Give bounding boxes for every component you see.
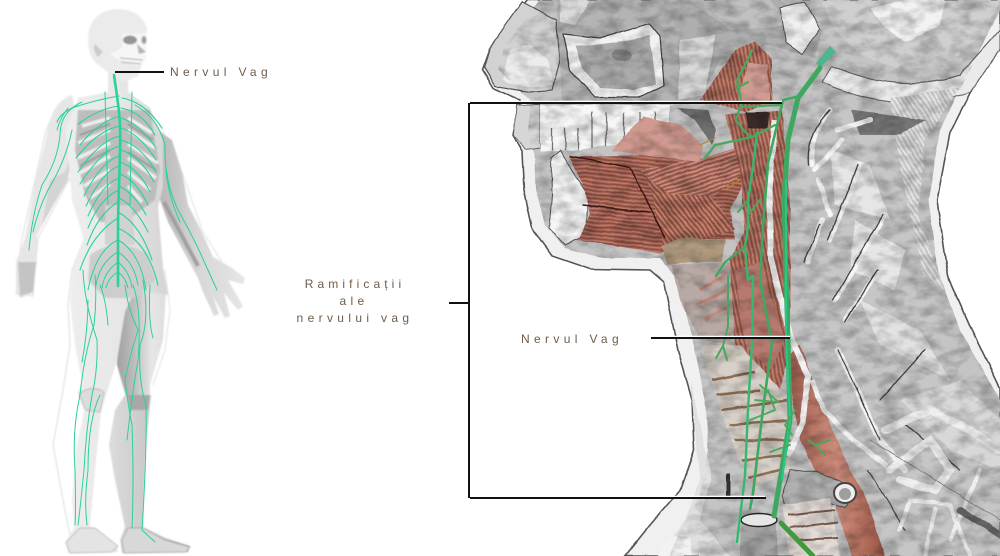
near leg nerves xyxy=(74,270,108,525)
pelvis branches xyxy=(88,92,146,290)
brain and cerebellum xyxy=(820,0,1000,70)
third trunk xyxy=(737,133,757,542)
vessel ring xyxy=(834,483,856,503)
rib cage xyxy=(75,110,160,222)
upper branches xyxy=(705,50,780,158)
second trunk xyxy=(750,96,800,509)
torso and near leg xyxy=(65,70,168,553)
upper pharynx muscles xyxy=(700,42,772,112)
mastoid bone xyxy=(780,2,820,54)
far leg nerves xyxy=(125,280,155,542)
left arm and hand xyxy=(16,95,80,298)
heading label: Nervul Vag left: Nervul Vag xyxy=(170,65,272,79)
central muscle column xyxy=(722,110,790,390)
panel: neck and head anatomy illustration xyxy=(470,0,1000,556)
upper skull shading xyxy=(556,0,688,102)
pelvis xyxy=(88,245,155,298)
lower trachea rings xyxy=(782,498,840,556)
rib branches xyxy=(57,96,120,270)
sinus cavity xyxy=(563,24,664,97)
right arm nerves xyxy=(135,105,217,290)
texture overlay xyxy=(470,0,1000,556)
label: Nervul Vag right with leader line: Nervul Vag xyxy=(521,332,623,346)
skull head xyxy=(88,9,147,82)
green nerves xyxy=(29,75,217,542)
right arm and hand xyxy=(150,125,245,318)
body silhouette xyxy=(16,9,245,553)
white internal jugular vein xyxy=(769,120,808,456)
larynx grey xyxy=(672,262,735,345)
floor of mouth and tongue muscles xyxy=(570,117,750,253)
organic anatomy base layer xyxy=(470,0,1000,556)
far leg xyxy=(117,285,166,400)
hyoid fragment xyxy=(662,238,725,265)
feet xyxy=(66,528,118,553)
nose xyxy=(484,2,560,92)
teeth xyxy=(514,105,670,151)
mid branches xyxy=(750,385,830,455)
tube opening xyxy=(741,514,777,526)
jaw bone xyxy=(549,150,588,245)
left lower branch xyxy=(716,276,728,360)
left arm nerves xyxy=(29,102,82,250)
cervical spine region xyxy=(795,110,1000,556)
carotid artery red xyxy=(785,345,890,556)
main vagus trunk xyxy=(774,68,820,516)
inner grey tissue xyxy=(498,0,1000,556)
panel: full body figure with vagus nerve xyxy=(16,9,245,553)
bracket: vagus nerve branches xyxy=(449,102,790,498)
neck back fan muscle xyxy=(880,88,960,290)
dark palate shadow xyxy=(678,108,716,145)
skin outline and neck silhouette xyxy=(482,0,1000,556)
text block: branches label: ale xyxy=(339,294,369,308)
lower green nerve xyxy=(781,523,813,556)
text block: branches label: nervului vag xyxy=(297,311,413,325)
main nerve trunk xyxy=(114,75,120,286)
trachea xyxy=(700,345,790,490)
aortic arch vessel xyxy=(782,469,855,556)
text block: branches label xyxy=(297,277,413,325)
green vagus nerve branches xyxy=(700,46,836,556)
nerve root patch xyxy=(816,46,836,68)
carotid tube cut end xyxy=(740,520,778,556)
text block: branches label: Ramificații xyxy=(305,277,405,291)
